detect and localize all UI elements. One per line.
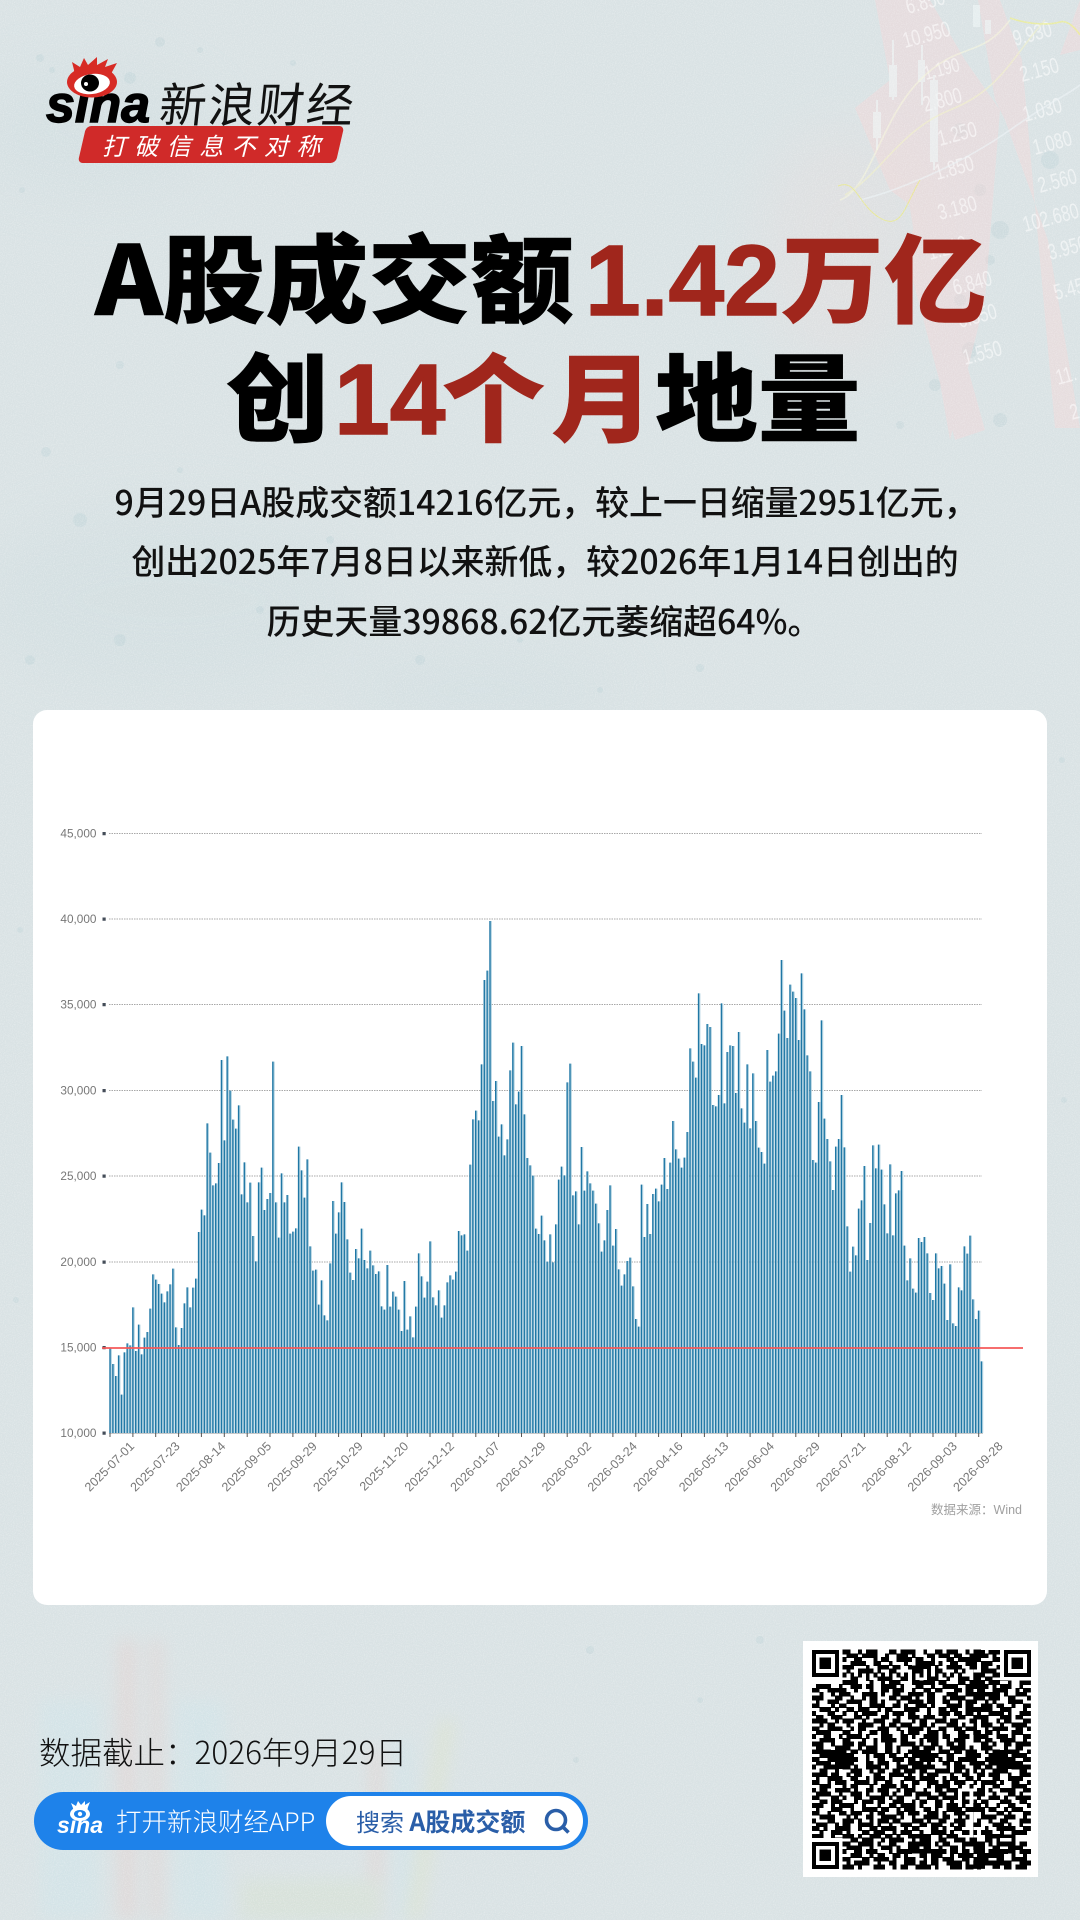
background texture and decoration: 3.180	[935, 192, 980, 226]
y axis labels	[60, 826, 97, 1440]
y axis labels: 35,000	[60, 998, 97, 1012]
summary line 2: 创出2025年7月8日以来新低，较2026年1月14日创出的	[131, 535, 959, 584]
x axis date labels: 2025-10-29	[311, 1439, 366, 1494]
x axis date labels: 2026-01-07	[448, 1439, 503, 1494]
background texture and decoration: 2.150	[1017, 54, 1062, 88]
y axis tick marks	[102, 832, 106, 1435]
red slogan banner	[78, 126, 344, 163]
data cutoff date: 数据截止：2026年9月29日	[39, 1728, 407, 1774]
logo mark: sina eye and wordmark: sina	[46, 76, 150, 134]
background texture and decoration: 10.950	[900, 18, 953, 54]
summary line 3: 历史天量39868.62亿元萎缩超64%。	[267, 595, 821, 644]
background texture and decoration: 1.080	[1030, 127, 1075, 161]
y axis labels: 45,000	[60, 826, 97, 840]
summary line 1: 9月29日A股成交额14216亿元，较上一日缩量2951亿元，	[115, 476, 977, 525]
x axis date labels	[82, 1439, 1006, 1494]
background texture and decoration: 1.210	[925, 232, 970, 266]
reference line at 15,000	[102, 1347, 1023, 1349]
summary text	[115, 476, 977, 644]
x axis date labels: 2025-08-14	[173, 1439, 228, 1494]
slogan text: 打破信息不对称	[102, 127, 329, 162]
y axis gridlines	[109, 834, 982, 1262]
icon: small sina logo: sina	[57, 1812, 103, 1838]
search text: 搜索 A股成交额	[356, 1803, 525, 1839]
logo: sina finance	[46, 57, 360, 163]
finder patterns	[812, 1650, 1031, 1869]
data source note: 数据来源：Wind	[931, 1503, 1022, 1517]
title line 1: A股成交额 万亿	[95, 204, 987, 343]
background texture and decoration: 1.190	[921, 53, 962, 84]
x axis date labels: 2026-09-03	[905, 1439, 960, 1494]
x axis date labels: 2026-07-21	[813, 1439, 869, 1494]
background texture and decoration: 1.850	[932, 152, 977, 186]
y axis labels: 10,000	[60, 1426, 97, 1440]
y axis labels: 15,000	[60, 1340, 97, 1354]
x axis date labels: 2026-06-29	[768, 1439, 823, 1494]
background texture and decoration: 2.560	[1035, 165, 1080, 199]
x axis date labels: 2025-11-20	[357, 1439, 411, 1494]
title line 2: 14	[334, 344, 445, 456]
x axis date labels: 2025-07-23	[128, 1439, 183, 1494]
background texture and decoration: 102.680	[1020, 199, 1080, 238]
background texture and decoration: 6.350	[955, 300, 1000, 334]
icon: magnifier	[544, 1808, 570, 1834]
background texture and decoration: 1.550	[960, 337, 1005, 371]
x axis date labels: 2025-12-12	[402, 1439, 457, 1494]
y axis labels: 40,000	[60, 912, 97, 926]
background texture and decoration: 11.	[1053, 362, 1080, 391]
chart card	[33, 710, 1047, 1605]
right-edge data modules	[973, 1650, 1031, 1869]
y axis labels: 25,000	[60, 1169, 97, 1183]
x axis date labels: 2026-05-13	[676, 1439, 731, 1494]
x axis date labels: 2026-01-29	[493, 1439, 548, 1494]
x axis date labels: 2026-08-12	[859, 1439, 914, 1494]
background texture and decoration: 2.800	[920, 84, 965, 118]
x axis date labels: 2025-09-05	[219, 1439, 274, 1494]
bars: core	[110, 921, 981, 1433]
x axis date labels: 2025-07-01	[82, 1439, 137, 1494]
bottom-right data modules	[992, 1844, 1031, 1867]
x axis date labels: 2025-09-29	[265, 1439, 320, 1494]
x axis ticks	[110, 1433, 979, 1437]
app search pill	[34, 1792, 588, 1850]
y axis labels: 20,000	[60, 1255, 97, 1269]
x axis date labels: 2026-06-04	[722, 1439, 777, 1494]
x axis date labels: 2026-03-02	[539, 1439, 594, 1494]
logo text: 新浪财经: 新浪财经	[156, 67, 360, 136]
pill label: 打开新浪财经APP	[116, 1802, 315, 1839]
x axis line	[109, 1432, 983, 1434]
title line 1: 1.42	[585, 225, 780, 337]
x axis date labels: 2026-03-24	[585, 1439, 640, 1494]
background texture and decoration: 1.250	[935, 118, 980, 152]
y axis labels: 30,000	[60, 1084, 97, 1098]
data modules	[812, 1652, 996, 1867]
white search box	[326, 1796, 583, 1846]
x axis date labels: 2026-09-28	[951, 1439, 1006, 1494]
icon: small sina logo	[57, 1801, 103, 1838]
background texture and decoration: 9.930	[1010, 18, 1055, 52]
background texture and decoration: 1.030	[1020, 94, 1065, 128]
finder quiet zones	[810, 1648, 1033, 1871]
title line 2: 创 个月地量	[226, 323, 861, 462]
background texture and decoration: 6.840	[950, 267, 995, 301]
alignment patterns	[827, 1665, 1016, 1854]
QR modules	[812, 1650, 1031, 1870]
x axis date labels: 2026-04-16	[631, 1439, 686, 1494]
QR code	[803, 1641, 1038, 1877]
bars: light halo	[111, 921, 982, 1433]
